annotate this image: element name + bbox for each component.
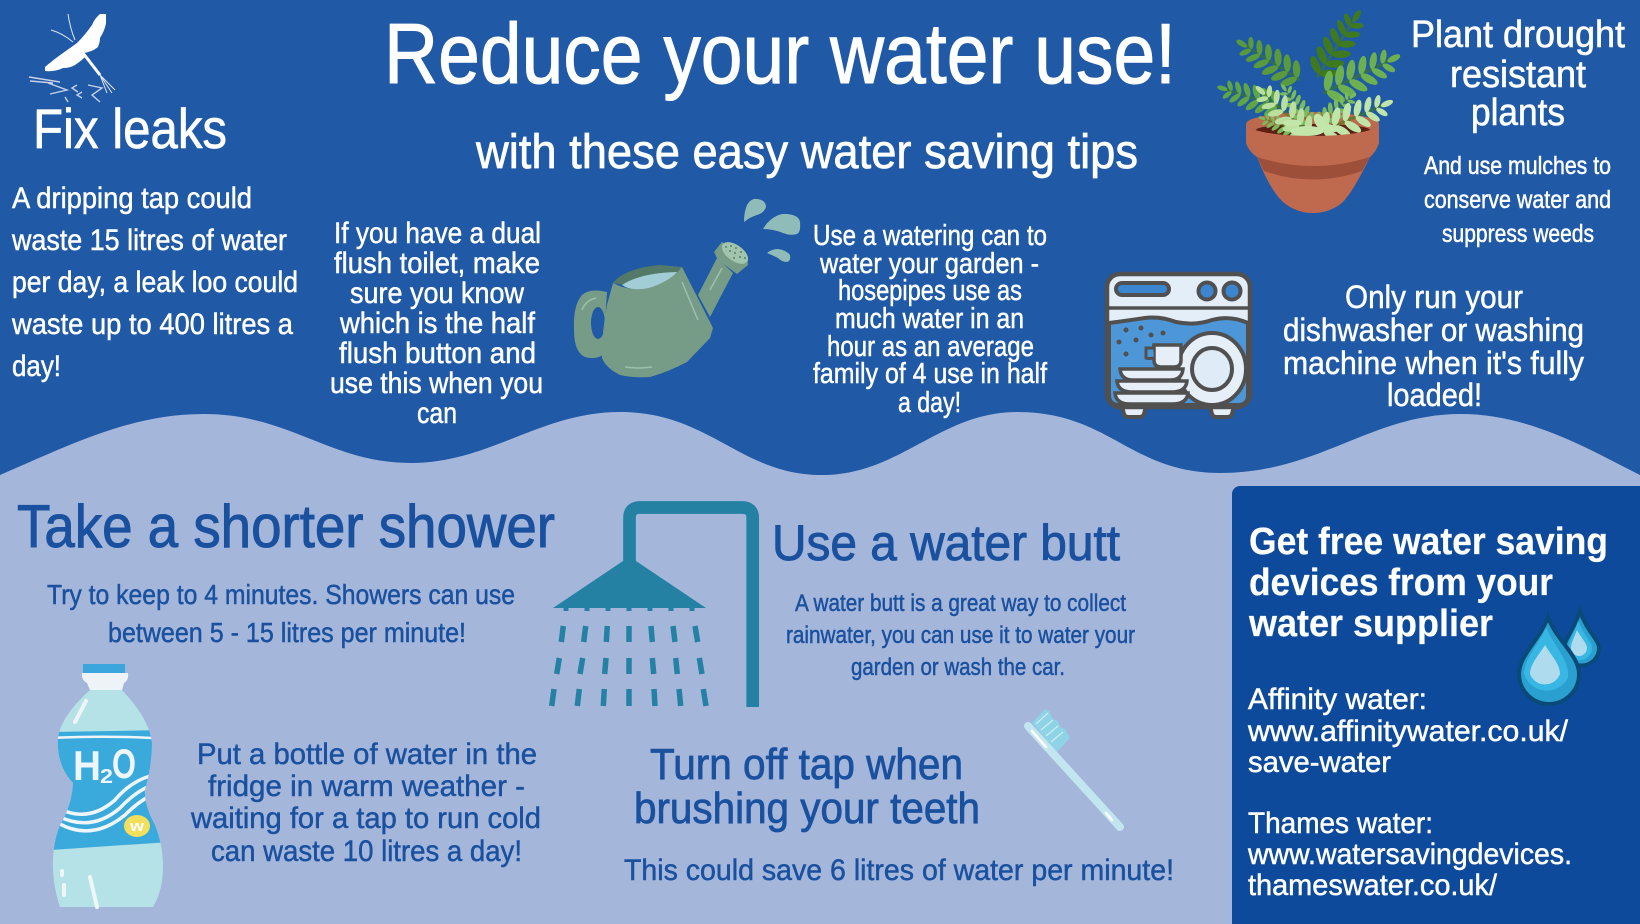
supplier links bbox=[1247, 683, 1572, 902]
heading: use a water butt: Use a water butt bbox=[772, 515, 1120, 571]
text: water butt tip bbox=[786, 590, 1135, 681]
heading: turn off tap when brushing your teeth: brushing your teeth bbox=[634, 784, 980, 833]
icon: water bottle: O bbox=[112, 740, 136, 787]
text: water butt tip: A water butt is a great way to collect bbox=[795, 590, 1126, 617]
text: dripping tap: day! bbox=[12, 350, 61, 383]
heading: plant drought resistant plants: resistant bbox=[1450, 54, 1586, 96]
heading: turn off tap when brushing your teeth bbox=[634, 740, 980, 833]
subtitle: with these easy water saving tips bbox=[475, 126, 1138, 179]
text: dishwasher tip: dishwasher or washing bbox=[1283, 312, 1584, 348]
text: dual flush toilet: which is the half bbox=[339, 307, 536, 340]
text: dishwasher tip: Only run your bbox=[1345, 279, 1523, 315]
icon: water bottle bbox=[50, 664, 170, 907]
wave: light blue lower section bbox=[0, 412, 1640, 924]
text: dishwasher tip bbox=[1283, 279, 1584, 413]
text: shower tip bbox=[47, 579, 515, 648]
panel heading: Get free water saving bbox=[1249, 521, 1608, 563]
text: watering can tip bbox=[813, 220, 1048, 419]
panel heading bbox=[1248, 521, 1608, 645]
text: dripping tap: A dripping tap could bbox=[12, 182, 252, 215]
icon: watering can bbox=[574, 199, 800, 377]
heading: plant drought resistant plants: plants bbox=[1471, 92, 1565, 134]
icon: dishwasher bbox=[1107, 274, 1250, 417]
supplier links: Affinity water: bbox=[1248, 683, 1427, 716]
icon: toothbrush bbox=[1028, 709, 1120, 827]
icon: water drops bbox=[1519, 611, 1599, 704]
heading: fix leaks: Fix leaks bbox=[33, 97, 227, 160]
text: watering can tip: family of 4 use in half bbox=[813, 358, 1048, 390]
text: bottle of water tip bbox=[190, 738, 541, 868]
text: watering can tip: much water in an bbox=[835, 303, 1024, 335]
text: dual flush toilet bbox=[330, 217, 543, 430]
text: bottle of water tip: fridge in warm weather - bbox=[208, 770, 525, 803]
icon: potted plant bbox=[1213, 1, 1409, 213]
text: watering can tip: Use a watering can to bbox=[813, 220, 1047, 252]
text: tap saving tip: This could save 6 litres of water per minute! bbox=[624, 854, 1174, 887]
panel heading: devices from your bbox=[1249, 562, 1553, 604]
text: dual flush toilet: use this when you bbox=[330, 367, 543, 400]
text: mulches tip: suppress weeds bbox=[1442, 220, 1594, 248]
text: dual flush toilet: sure you know bbox=[350, 277, 524, 310]
text: dripping tap: per day, a leak loo could bbox=[12, 266, 298, 299]
text: dishwasher tip: loaded! bbox=[1387, 377, 1482, 413]
text: bottle of water tip: can waste 10 litres a day! bbox=[211, 835, 522, 868]
text: dual flush toilet: can bbox=[417, 397, 457, 430]
heading: plant drought resistant plants: Plant drought bbox=[1411, 14, 1625, 56]
text: dripping tap: waste up to 400 litres a bbox=[11, 308, 293, 341]
heading: take a shorter shower: Take a shorter shower bbox=[17, 493, 555, 560]
text: dripping tap: waste 15 litres of water bbox=[11, 224, 287, 257]
icon: mayfly logo bbox=[29, 14, 115, 102]
text: dishwasher tip: machine when it's fully bbox=[1283, 345, 1584, 381]
title: Reduce your water use! bbox=[384, 7, 1176, 102]
text: mulches tip: conserve water and bbox=[1424, 186, 1611, 214]
supplier links: thameswater.co.uk/ bbox=[1248, 869, 1498, 902]
text: watering can tip: water your garden - bbox=[819, 248, 1039, 280]
text: mulches tip bbox=[1424, 152, 1611, 248]
supplier links: save-water bbox=[1248, 746, 1391, 779]
text: dual flush toilet: If you have a dual bbox=[334, 217, 541, 250]
icon: water bottle: w bbox=[129, 818, 144, 835]
icon: water bottle: 2 bbox=[100, 766, 113, 788]
heading: plant drought resistant plants bbox=[1411, 14, 1625, 134]
text: bottle of water tip: Put a bottle of water in the bbox=[197, 738, 537, 771]
text: water butt tip: rainwater, you can use it to water your bbox=[786, 622, 1135, 649]
icon: water bottle: H bbox=[73, 742, 101, 789]
text: watering can tip: hour as an average bbox=[827, 331, 1034, 363]
icon: shower bbox=[552, 508, 753, 707]
text: dual flush toilet: flush toilet, make bbox=[334, 247, 540, 280]
text: dual flush toilet: flush button and bbox=[339, 337, 536, 370]
text: watering can tip: a day! bbox=[898, 387, 961, 419]
text: shower tip: between 5 - 15 litres per minute! bbox=[108, 617, 466, 648]
heading: turn off tap when brushing your teeth: Turn off tap when bbox=[650, 740, 963, 789]
text: watering can tip: hosepipes use as bbox=[838, 275, 1022, 307]
supplier links: www.watersavingdevices. bbox=[1247, 838, 1572, 871]
text: shower tip: Try to keep to 4 minutes. Showers can use bbox=[47, 579, 515, 610]
text: mulches tip: And use mulches to bbox=[1424, 152, 1611, 180]
supplier links: www.affinitywater.co.uk/ bbox=[1247, 715, 1569, 748]
text: bottle of water tip: waiting for a tap to run cold bbox=[190, 802, 541, 835]
supplier links: Thames water: bbox=[1248, 807, 1433, 840]
panel: free water saving devices bbox=[1232, 486, 1640, 924]
text: dripping tap bbox=[11, 182, 298, 383]
panel heading: water supplier bbox=[1248, 603, 1493, 645]
text: water butt tip: garden or wash the car. bbox=[851, 654, 1065, 681]
